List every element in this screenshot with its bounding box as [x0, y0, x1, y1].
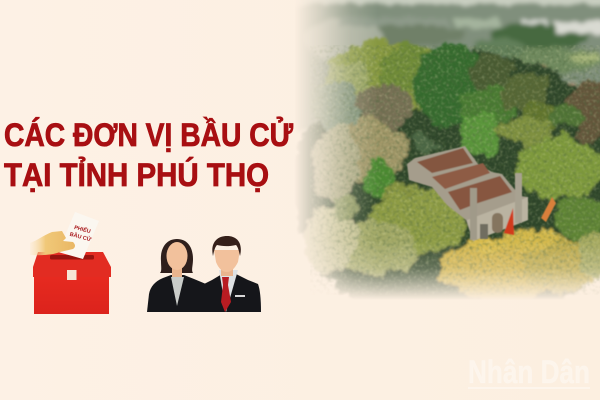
- gate arch: [492, 213, 503, 233]
- icon: ballot box: [30, 212, 111, 314]
- tree canopy: [298, 36, 600, 298]
- title: [4, 116, 293, 193]
- banner: [541, 197, 556, 222]
- photo: aerial view of temple among trees: [298, 0, 600, 298]
- lock: [67, 270, 76, 280]
- woman: [147, 239, 206, 312]
- foliage texture: [310, 45, 600, 295]
- temple building: [407, 146, 556, 241]
- hand: [30, 231, 75, 255]
- flag: [504, 208, 514, 235]
- box lid: [33, 252, 111, 277]
- distant landscape: [270, 0, 600, 130]
- towers: [470, 188, 477, 240]
- man: [198, 236, 261, 312]
- rear walls: [407, 146, 528, 241]
- facade: [467, 197, 528, 241]
- roofs: [417, 148, 473, 173]
- ballot paper: BẦU CỬ: [69, 231, 92, 243]
- title: TẠI TỈNH PHÚ THỌ: [4, 156, 269, 193]
- relief panel: [480, 224, 488, 239]
- ballot paper: PHIẾU: [73, 224, 91, 235]
- box body: [34, 277, 109, 314]
- title: CÁC ĐƠN VỊ BẦU CỬ: [4, 116, 293, 153]
- ballot paper: [58, 212, 99, 259]
- icon: two candidates: [147, 236, 261, 312]
- slot: [50, 255, 94, 260]
